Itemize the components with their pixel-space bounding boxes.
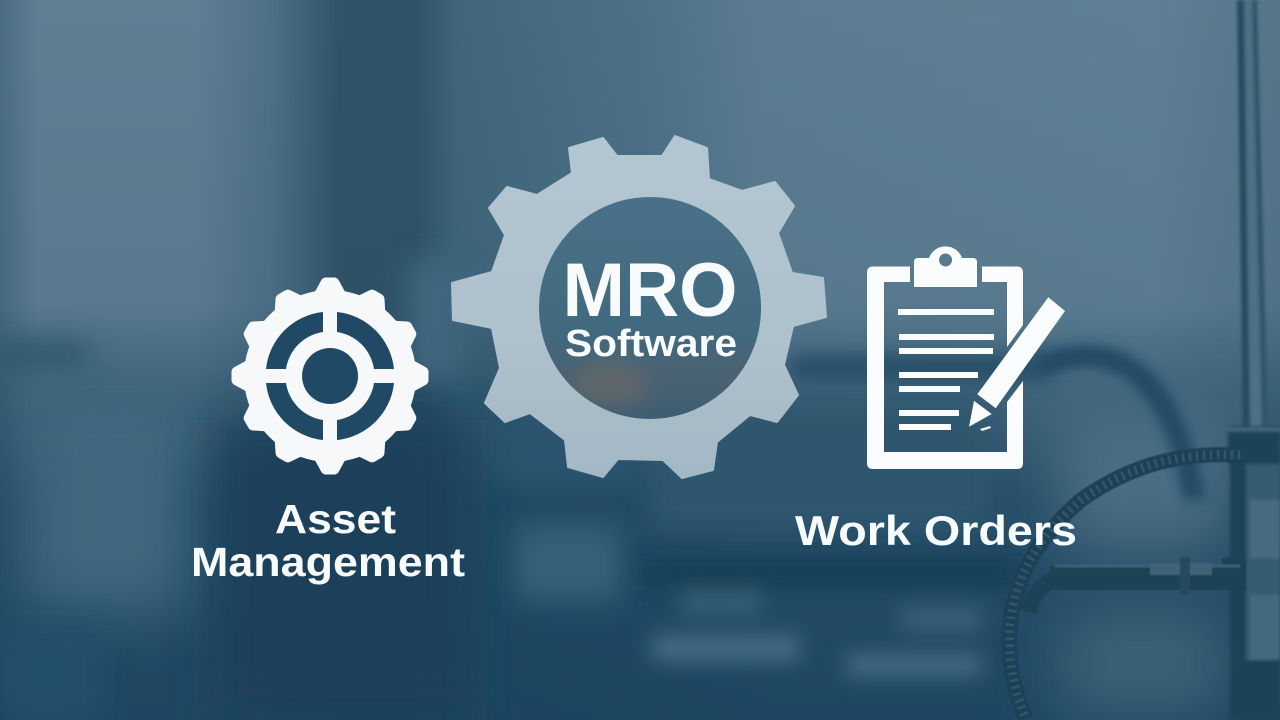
work orders group [795,246,1077,554]
icon: asset gear [237,283,423,469]
label: MRO: MRO [562,248,738,333]
clipboard clip [914,246,977,287]
label: Software: Software [565,323,737,365]
asset management group [191,283,465,585]
gear hole background [537,195,763,421]
label: Asset Management: Asset [275,496,396,542]
large translucent gear [452,136,826,478]
background: blurred dark arch pipe [1040,356,1195,500]
icon: clipboard with pencil [867,246,1065,469]
background: vertical pipe [1228,0,1280,720]
pencil [969,297,1065,431]
label: Asset Management: Management [191,539,465,585]
gear body [244,290,416,462]
clipboard board [867,266,1023,469]
gear backing [260,306,400,446]
background: horizontal pipe [1028,557,1240,612]
center gear with MRO Software [452,136,826,478]
text lines on clipboard [898,309,994,430]
label: Asset Management [191,496,465,585]
gear teeth [237,283,423,469]
background: corrugated hose [1009,455,1240,718]
label: Work Orders: Work Orders [795,507,1077,554]
warm tint inside gear hole [572,363,648,407]
